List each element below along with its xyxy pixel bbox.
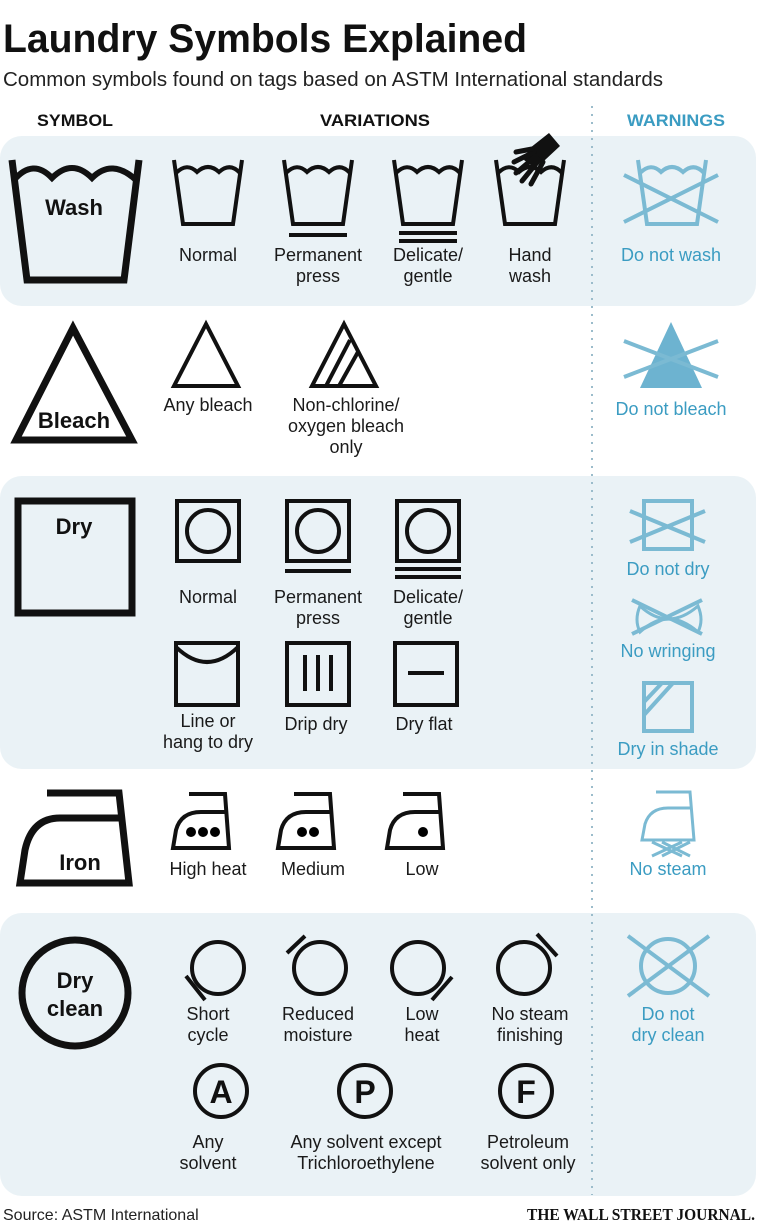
icon: no steam finishing (498, 934, 557, 994)
panel: dry: No wringing (620, 641, 716, 661)
panel: dry clean: Trichloroethylene (297, 1153, 435, 1173)
panel: dry: gentle (403, 608, 453, 628)
icon: wash normal (174, 160, 242, 224)
panel: dry: Normal (179, 587, 237, 607)
column headers: SYMBOL (37, 111, 113, 130)
icon: P solvent: P (354, 1074, 376, 1110)
icon: big wash tub (12, 160, 139, 280)
panel: bleach (16, 322, 727, 457)
icon: do not bleach (624, 322, 718, 388)
icon: F petroleum: F (516, 1074, 536, 1110)
icon: A any solvent: A (209, 1074, 233, 1110)
panel: dry: press (296, 608, 340, 628)
subtitle: Common symbols found on tags based on ASTM International standards (3, 69, 663, 91)
panel: dry (18, 501, 719, 759)
icon: P solvent (339, 1065, 391, 1117)
icon: iron medium (278, 794, 334, 848)
panel: bleach: Do not bleach (615, 399, 727, 419)
icon: dry flat (395, 643, 457, 705)
icon: line dry (176, 643, 238, 705)
icon: big dry square: Dry (56, 514, 93, 539)
panel: dry clean: moisture (283, 1025, 353, 1045)
panel: dry clean (22, 934, 709, 1173)
panel: dry clean: Any (192, 1132, 224, 1152)
icon: dry delicate (395, 501, 461, 577)
icon: non-chlorine bleach (312, 324, 376, 386)
panel: bleach: Non-chlorine/ (292, 395, 400, 415)
panel: dry: Line or (180, 711, 236, 731)
icon: dry in shade (644, 683, 692, 731)
icon: short cycle (186, 942, 244, 1000)
panel: wash: press (296, 266, 340, 286)
icon: big bleach triangle: Bleach (38, 408, 110, 433)
icon: do not dry (630, 501, 705, 549)
panel: dry: Dry in shade (617, 739, 719, 759)
panel: wash: Permanent (274, 245, 362, 265)
icon: iron high (173, 794, 229, 848)
panel: dry clean: Low (405, 1004, 440, 1024)
icon: dry permanent press (285, 501, 351, 571)
icon: wash permanent press (284, 160, 352, 235)
panel: wash: Delicate/ (393, 245, 463, 265)
icon: hand wash (496, 133, 564, 224)
panel: wash: gentle (403, 266, 453, 286)
icon: big wash tub: Wash (45, 195, 103, 220)
icon: big dry clean circle: Dry (57, 968, 94, 993)
panel: bleach: only (329, 437, 363, 457)
panel: bleach: Any bleach (163, 395, 253, 415)
column headers: VARIATIONS (320, 111, 430, 130)
column headers: WARNINGS (627, 111, 725, 130)
panel: iron: High heat (169, 859, 247, 879)
panel: iron: Low (405, 859, 440, 879)
icon: A any solvent (195, 1065, 247, 1117)
panel: dry: Do not dry (626, 559, 710, 579)
icon: no wringing (632, 600, 702, 634)
panel: dry clean: solvent only (480, 1153, 576, 1173)
panel: dry clean: No steam (491, 1004, 569, 1024)
icon: big dry clean circle: clean (47, 996, 103, 1021)
panel: wash (12, 133, 721, 286)
icon: big bleach triangle (16, 328, 132, 440)
title: Laundry Symbols Explained (3, 17, 527, 61)
icon: drip dry (287, 643, 349, 705)
panel: iron: No steam (629, 859, 707, 879)
icon: do not dry clean (628, 936, 709, 996)
icon: low heat (392, 942, 452, 1000)
panel: iron (20, 792, 707, 883)
panel: dry clean: finishing (497, 1025, 563, 1045)
icon: big dry clean circle (22, 940, 128, 1046)
panel: wash: Hand (508, 245, 552, 265)
panel: dry clean: Any solvent except (290, 1132, 442, 1152)
column headers (37, 111, 725, 130)
panel: wash: Normal (179, 245, 237, 265)
icon: iron low (387, 794, 443, 848)
icon: big iron: Iron (59, 850, 101, 875)
icon: no steam (642, 792, 694, 856)
panel: dry: hang to dry (163, 732, 253, 752)
panel: dry clean: dry clean (631, 1025, 705, 1045)
panel: dry clean: cycle (187, 1025, 229, 1045)
panel: dry clean: Reduced (282, 1004, 354, 1024)
panel: wash: wash (508, 266, 551, 286)
panel: iron: Medium (281, 859, 345, 879)
icon: dry normal (177, 501, 239, 561)
panel: dry: Permanent (274, 587, 362, 607)
panel: dry clean: Do not (641, 1004, 695, 1024)
panel: dry clean: heat (404, 1025, 440, 1045)
icon: do not wash (624, 160, 718, 224)
panel: dry: Dry flat (395, 714, 453, 734)
panel: dry: Drip dry (284, 714, 348, 734)
icon: big iron (20, 793, 129, 883)
panel: dry clean: Short (186, 1004, 230, 1024)
icon: big dry square (18, 501, 132, 613)
footer source: Source: ASTM International (3, 1207, 199, 1224)
icon: wash delicate (394, 160, 462, 241)
panel: dry: Delicate/ (393, 587, 463, 607)
icon: any bleach (174, 324, 238, 386)
icon: reduced moisture (287, 936, 346, 994)
panel: dry clean: solvent (179, 1153, 237, 1173)
panel: bleach: oxygen bleach (288, 416, 404, 436)
icon: F petroleum (500, 1065, 552, 1117)
panel: wash: Do not wash (621, 245, 721, 265)
panel: dry clean: Petroleum (487, 1132, 569, 1152)
